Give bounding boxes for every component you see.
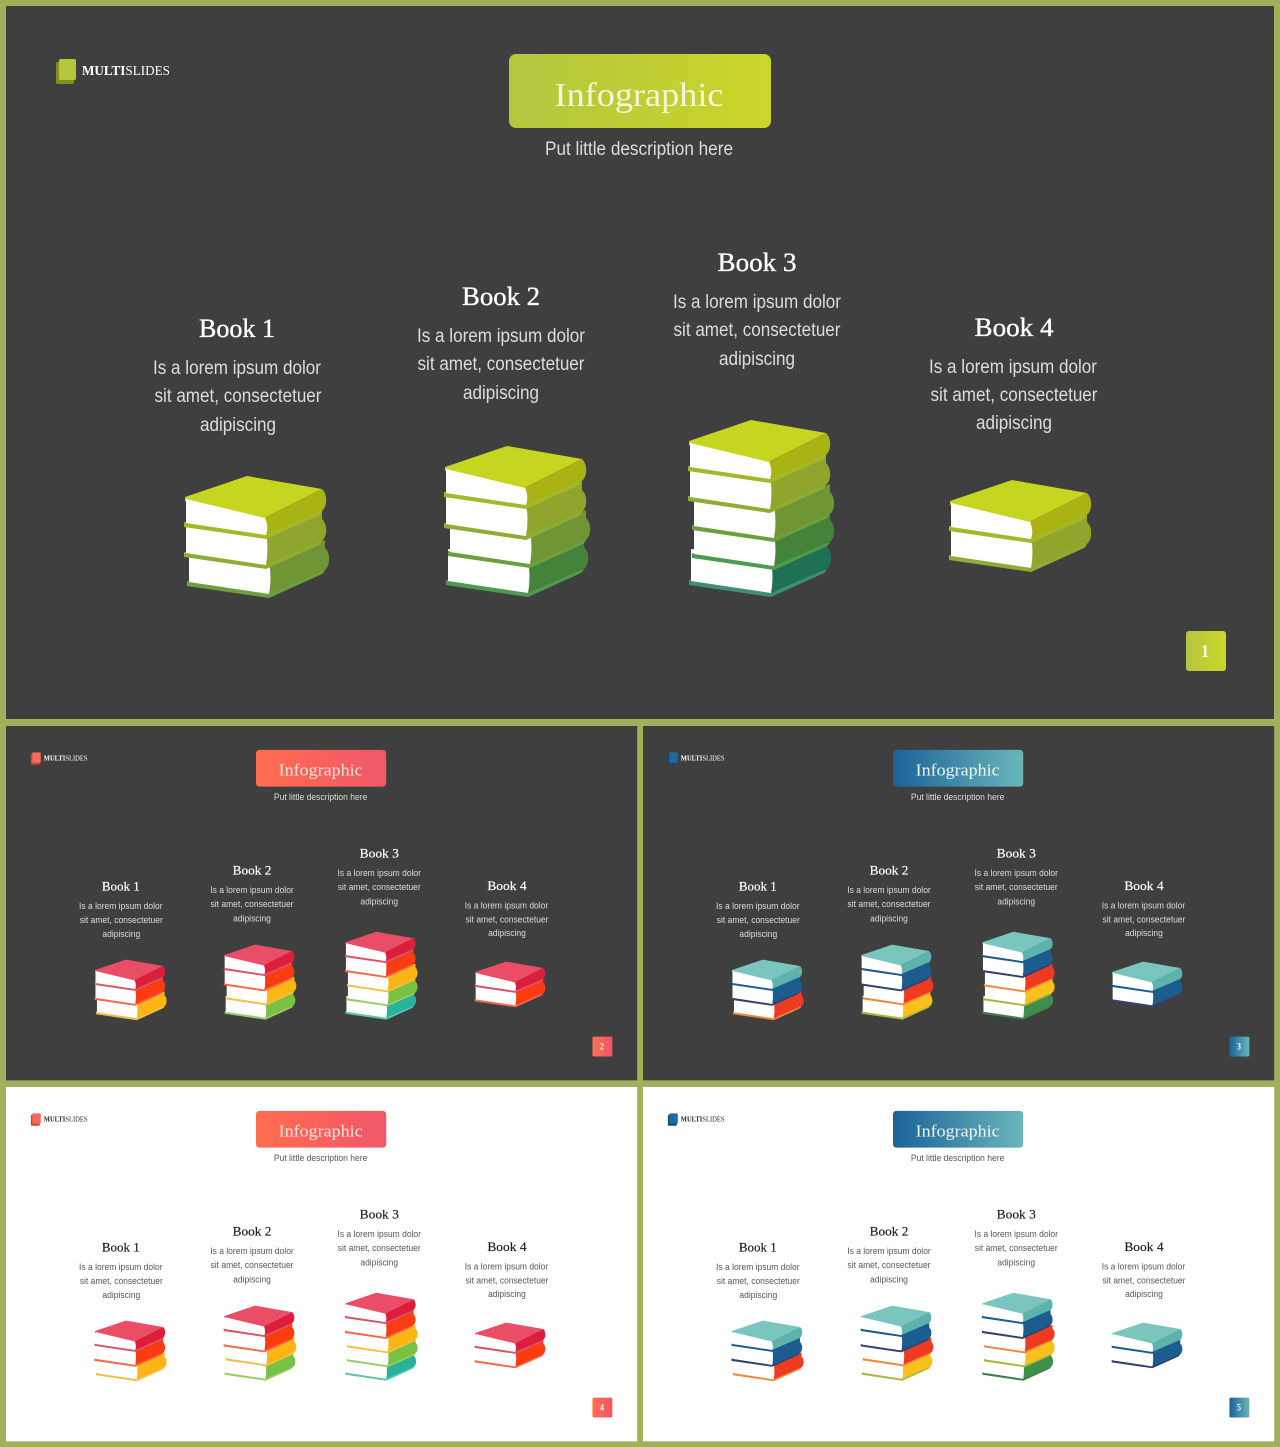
column: Book 4 text: Book 4 <box>487 1239 527 1254</box>
title button <box>256 1111 386 1148</box>
column: Book 1 text <box>79 1240 163 1301</box>
column: Book 1 text: Book 1 <box>739 879 777 894</box>
column: Book 2 text <box>210 863 294 924</box>
book stack 2 <box>444 446 590 597</box>
column: Book 4 text: adipiscing <box>488 928 526 939</box>
column: Book 2 text <box>210 1224 294 1285</box>
column: Book 4 text: adipiscing <box>1125 1289 1163 1300</box>
logo <box>31 1113 88 1126</box>
book stack 4 <box>949 480 1091 572</box>
book stack 1 <box>731 1321 804 1381</box>
column: Book 3 text: sit amet, consectetuer <box>338 882 421 893</box>
page badge: 4 <box>600 1403 605 1413</box>
column: Book 3 text: sit amet, consectetuer <box>674 320 841 341</box>
page badge <box>1186 631 1226 671</box>
column: Book 2 text: adipiscing <box>233 1274 271 1285</box>
column: Book 2 text: adipiscing <box>870 1274 908 1285</box>
slide 5: blue on white <box>643 1087 1274 1441</box>
column: Book 3 text: Book 3 <box>997 1207 1036 1222</box>
book stack 1 <box>94 960 167 1020</box>
book stack 3 <box>982 1293 1055 1381</box>
column: Book 4 text: adipiscing <box>488 1289 526 1300</box>
subtitle: Put little description here <box>911 792 1004 803</box>
column: Book 2 text: Book 2 <box>462 282 540 311</box>
slide 2: red on dark <box>6 726 637 1080</box>
column: Book 1 text: Is a lorem ipsum dolor <box>716 1262 800 1273</box>
column: Book 1 text: sit amet, consectetuer <box>154 386 322 407</box>
book stack 3 <box>345 932 418 1020</box>
column: Book 1 text: sit amet, consectetuer <box>717 915 800 926</box>
logo: MULTISLIDES <box>44 754 88 762</box>
column: Book 3 text: Book 3 <box>718 248 796 277</box>
column: Book 4 text <box>929 313 1098 434</box>
subtitle: Put little description here <box>545 139 733 160</box>
column: Book 3 text: Is a lorem ipsum dolor <box>337 868 421 879</box>
column: Book 4 text: sit amet, consectetuer <box>465 1275 548 1286</box>
book stack 1 <box>184 476 329 598</box>
logo <box>668 1113 725 1126</box>
column: Book 2 text: sit amet, consectetuer <box>418 354 585 375</box>
book stack 1 <box>731 960 804 1020</box>
column: Book 3 text: Book 3 <box>360 1207 399 1222</box>
column: Book 3 text: sit amet, consectetuer <box>975 1243 1058 1254</box>
column: Book 3 text <box>337 1207 421 1268</box>
column: Book 3 text <box>974 846 1058 907</box>
page badge <box>1229 1037 1249 1057</box>
column: Book 4 text: Book 4 <box>1124 1239 1164 1254</box>
page badge <box>1229 1398 1249 1418</box>
column: Book 3 text: Book 3 <box>360 846 399 861</box>
book stack 2 <box>861 1306 933 1381</box>
column: Book 1 text: adipiscing <box>739 1290 777 1301</box>
slide 4: red on white <box>6 1087 637 1441</box>
column: Book 1 text: Book 1 <box>199 314 275 343</box>
page badge: 5 <box>1237 1403 1242 1413</box>
book stack 3 <box>688 420 834 597</box>
column: Book 2 text: Is a lorem ipsum dolor <box>210 1246 294 1257</box>
column: Book 2 text <box>847 863 931 924</box>
column: Book 3 text: Is a lorem ipsum dolor <box>673 292 842 313</box>
column: Book 3 text <box>673 248 842 370</box>
column: Book 3 text: adipiscing <box>997 1257 1035 1268</box>
column: Book 4 text: Book 4 <box>974 313 1054 342</box>
column: Book 4 text <box>1102 1239 1185 1300</box>
subtitle: Put little description here <box>274 1153 367 1164</box>
column: Book 1 text: sit amet, consectetuer <box>80 1276 163 1287</box>
slide 3: blue on dark <box>643 726 1274 1080</box>
column: Book 4 text: sit amet, consectetuer <box>1102 914 1185 925</box>
book stack 3 <box>982 932 1055 1020</box>
column: Book 4 text <box>1102 878 1185 939</box>
column: Book 2 text: Is a lorem ipsum dolor <box>847 1246 931 1257</box>
title button: Infographic <box>554 77 724 114</box>
book stack 3 <box>345 1293 418 1381</box>
title button <box>256 750 386 787</box>
column: Book 2 text: Is a lorem ipsum dolor <box>210 885 294 896</box>
column: Book 4 text: Is a lorem ipsum dolor <box>929 357 1098 378</box>
book stack 4 <box>475 962 545 1007</box>
page badge: 3 <box>1237 1042 1242 1052</box>
column: Book 4 text: sit amet, consectetuer <box>930 385 1098 406</box>
column: Book 1 text: Is a lorem ipsum dolor <box>716 901 800 912</box>
title button: Infographic <box>279 1122 363 1141</box>
column: Book 1 text <box>716 1240 800 1301</box>
column: Book 4 text: Is a lorem ipsum dolor <box>1102 1261 1185 1272</box>
column: Book 3 text: adipiscing <box>997 896 1035 907</box>
title button: Infographic <box>916 1122 1000 1141</box>
logo: MULTISLIDES <box>681 754 725 762</box>
column: Book 4 text: Book 4 <box>1124 878 1164 893</box>
column: Book 1 text: Book 1 <box>739 1240 777 1255</box>
page badge: 1 <box>1200 641 1210 661</box>
column: Book 2 text: Book 2 <box>233 1224 271 1239</box>
column: Book 4 text: adipiscing <box>976 413 1052 434</box>
column: Book 2 text: Book 2 <box>870 1224 908 1239</box>
page badge <box>592 1037 612 1057</box>
column: Book 4 text: sit amet, consectetuer <box>1102 1275 1185 1286</box>
column: Book 4 text: Book 4 <box>487 878 527 893</box>
column: Book 2 text: Is a lorem ipsum dolor <box>847 885 931 896</box>
column: Book 2 text <box>847 1224 931 1285</box>
column: Book 1 text: adipiscing <box>102 1290 140 1301</box>
column: Book 1 text <box>153 314 322 436</box>
slide 1: large green on dark <box>6 6 1274 719</box>
book stack 4 <box>475 1323 545 1368</box>
title button: Infographic <box>279 761 363 780</box>
page badge <box>592 1398 612 1418</box>
column: Book 2 text: Book 2 <box>233 863 271 878</box>
book stack 4 <box>1112 962 1182 1007</box>
column: Book 3 text: sit amet, consectetuer <box>338 1243 421 1254</box>
column: Book 1 text: Book 1 <box>102 879 140 894</box>
book stack 1 <box>94 1321 167 1381</box>
column: Book 4 text: sit amet, consectetuer <box>465 914 548 925</box>
column: Book 4 text: adipiscing <box>1125 928 1163 939</box>
logo <box>668 752 725 765</box>
logo: MULTISLIDES <box>82 64 170 79</box>
column: Book 4 text: Is a lorem ipsum dolor <box>1102 900 1185 911</box>
column: Book 1 text: Is a lorem ipsum dolor <box>79 1262 163 1273</box>
title button <box>893 750 1023 787</box>
column: Book 3 text: sit amet, consectetuer <box>975 882 1058 893</box>
column: Book 1 text: adipiscing <box>102 929 140 940</box>
logo: MULTISLIDES <box>44 1115 88 1123</box>
column: Book 2 text <box>417 282 586 404</box>
column: Book 3 text: Book 3 <box>997 846 1036 861</box>
column: Book 1 text: sit amet, consectetuer <box>717 1276 800 1287</box>
column: Book 1 text: adipiscing <box>200 415 276 436</box>
column: Book 3 text: Is a lorem ipsum dolor <box>974 868 1058 879</box>
column: Book 1 text: Is a lorem ipsum dolor <box>153 358 322 379</box>
column: Book 4 text: Is a lorem ipsum dolor <box>465 1261 548 1272</box>
column: Book 2 text: sit amet, consectetuer <box>211 899 294 910</box>
column: Book 2 text: Book 2 <box>870 863 908 878</box>
column: Book 2 text: sit amet, consectetuer <box>848 1260 931 1271</box>
title button: Infographic <box>916 761 1000 780</box>
column: Book 2 text: sit amet, consectetuer <box>211 1260 294 1271</box>
column: Book 3 text: Is a lorem ipsum dolor <box>974 1229 1058 1240</box>
column: Book 2 text: Is a lorem ipsum dolor <box>417 326 586 347</box>
column: Book 2 text: adipiscing <box>233 913 271 924</box>
logo <box>31 752 88 765</box>
title button <box>893 1111 1023 1148</box>
book stack 4 <box>1112 1323 1182 1368</box>
column: Book 1 text: sit amet, consectetuer <box>80 915 163 926</box>
column: Book 3 text <box>974 1207 1058 1268</box>
column: Book 4 text: Is a lorem ipsum dolor <box>465 900 548 911</box>
logo: MULTISLIDES <box>681 1115 725 1123</box>
book stack 2 <box>224 945 296 1020</box>
column: Book 4 text <box>465 878 548 939</box>
column: Book 3 text: adipiscing <box>360 1257 398 1268</box>
logo <box>56 59 170 84</box>
column: Book 4 text <box>465 1239 548 1300</box>
column: Book 1 text <box>716 879 800 940</box>
subtitle: Put little description here <box>274 792 367 803</box>
book stack 2 <box>224 1306 296 1381</box>
column: Book 3 text <box>337 846 421 907</box>
column: Book 3 text: adipiscing <box>360 896 398 907</box>
book stack 2 <box>861 945 933 1020</box>
column: Book 2 text: sit amet, consectetuer <box>848 899 931 910</box>
page badge: 2 <box>600 1042 605 1052</box>
column: Book 1 text: adipiscing <box>739 929 777 940</box>
column: Book 3 text: adipiscing <box>719 349 795 370</box>
column: Book 1 text: Book 1 <box>102 1240 140 1255</box>
title button <box>509 54 771 128</box>
column: Book 1 text <box>79 879 163 940</box>
column: Book 1 text: Is a lorem ipsum dolor <box>79 901 163 912</box>
column: Book 3 text: Is a lorem ipsum dolor <box>337 1229 421 1240</box>
column: Book 2 text: adipiscing <box>870 913 908 924</box>
column: Book 2 text: adipiscing <box>463 383 539 404</box>
subtitle: Put little description here <box>911 1153 1004 1164</box>
